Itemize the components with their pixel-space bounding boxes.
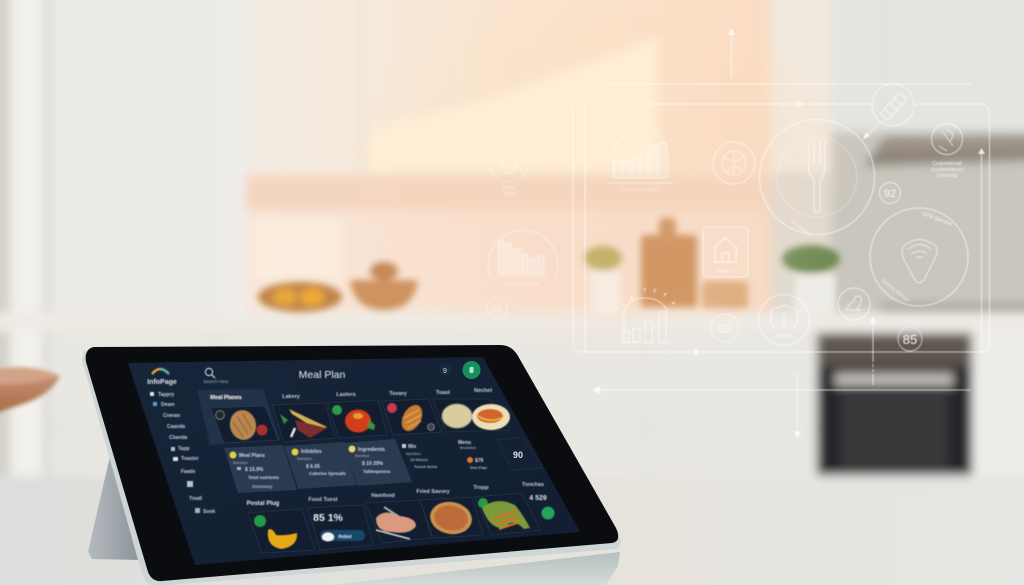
plant and pot right	[782, 245, 840, 317]
tablet kickstand	[88, 456, 138, 560]
food photos row 1	[216, 401, 510, 442]
number card: 90	[513, 450, 523, 460]
icon: shield circle	[758, 294, 810, 346]
bar chart: falling dome chart: Nutrition Balance	[505, 281, 540, 286]
badge: 92	[880, 182, 900, 204]
row 2 card contents: Tuned items	[414, 464, 438, 469]
icon: shield circle: Power	[777, 333, 791, 339]
row 2 card contents: Nutrition	[406, 452, 421, 456]
row 2 card contents: 10 Diners	[410, 457, 429, 462]
sidebar	[147, 369, 215, 515]
menu	[150, 392, 215, 515]
row 3 category labels: Food Tuest	[308, 497, 338, 503]
row 2 card contents	[230, 440, 488, 489]
row 3 category labels: Tonchas	[522, 482, 544, 488]
row 3 category labels: Postal Plug	[247, 501, 280, 507]
icon: small bird circle	[838, 288, 870, 320]
orange bowl	[258, 282, 342, 312]
row 2 card contents: Diet Plan	[470, 465, 488, 470]
menu: Tapp	[178, 446, 190, 452]
row 3 category labels: Fried Savory	[416, 489, 451, 495]
icon: faded scale circle	[490, 144, 528, 197]
tablet reflection on counter	[330, 552, 620, 585]
row 1 category labels: Tovary	[389, 391, 408, 397]
warm light glow	[360, 0, 840, 340]
holographic interface	[487, 28, 990, 438]
wooden plate at left edge	[0, 367, 60, 415]
icon: knife and fork badge with caption: coridemlaces	[931, 167, 963, 173]
icon: wifi location pin: GFS Service	[921, 211, 953, 228]
row 2 card contents: Tablespoons	[363, 469, 391, 474]
row 2 card contents: $ 10 20%	[362, 461, 384, 467]
icon: wifi location pin	[870, 208, 968, 306]
heading: Meal Plan: Meal Plan	[299, 369, 346, 381]
row 2 card contents: Breakfast	[460, 446, 477, 450]
cutting board and jar	[641, 218, 748, 308]
bar chart: bottom gauge chart	[615, 288, 678, 343]
row 3 category labels: Tropp	[473, 485, 489, 491]
logo	[147, 369, 177, 386]
badge: 32: 32	[491, 304, 503, 315]
search	[203, 368, 229, 384]
header action buttons	[439, 361, 480, 379]
food photos and stats row 3: 85 1%	[313, 512, 344, 524]
wooden bowl	[350, 262, 418, 310]
tablet body	[82, 345, 620, 585]
icon: house card	[703, 227, 748, 277]
row 3 food cards	[248, 493, 540, 553]
bar chart: falling dome chart	[488, 230, 558, 286]
badge: 85: 85	[903, 332, 917, 347]
row 1 food cards	[211, 399, 510, 443]
row 2 card contents: $ 15.9%	[245, 467, 264, 473]
search: Search Here	[203, 379, 229, 384]
icon: knife and fork badge with caption: Coaresional	[932, 161, 962, 167]
icon: faded scale circle: Meals	[502, 185, 516, 191]
menu: Cranan	[163, 413, 180, 419]
menu: Tmall	[189, 496, 203, 502]
row 3 category labels: Hamfood	[371, 493, 395, 499]
icon: faded scale circle: Today	[502, 191, 516, 197]
blurred kitchen objects	[258, 218, 840, 317]
icon: fork on plate: Flo Scares	[789, 219, 812, 238]
row 2 info cards	[224, 439, 412, 493]
menu: Sook	[203, 509, 215, 515]
menu: Tappry	[158, 392, 175, 398]
row 1 category labels: Toast	[436, 390, 450, 396]
row 2 card contents: Meal Plans	[239, 453, 265, 459]
row 2 card contents: Nutrition	[233, 461, 248, 465]
row 2 card contents: Total nutrients	[248, 475, 279, 480]
menu: Faads	[181, 469, 196, 475]
icon: knife and fork badge with caption	[931, 124, 963, 179]
badge: 85	[898, 327, 922, 351]
row 1 category labels	[197, 388, 492, 445]
icon: fork on plate	[760, 120, 874, 238]
badge: 32	[487, 298, 507, 318]
menu: Toaster	[181, 456, 199, 462]
row 2 card contents: $79	[475, 458, 484, 464]
row 2 card contents: Ingredients	[358, 447, 385, 453]
plant and vase left	[584, 246, 622, 315]
badge: 05: 05	[718, 322, 732, 336]
icon: globe circle	[713, 142, 755, 184]
row 2 card contents: Calories Spreads	[309, 471, 346, 476]
row 1 category labels: Lasters	[336, 392, 356, 398]
row 2 card contents: Mix	[408, 444, 417, 450]
number card	[497, 437, 543, 470]
icon: knife and fork badge with caption: Geocing	[937, 173, 957, 179]
food photos and stats row 3	[254, 495, 554, 549]
bar chart: rising dome chart	[608, 131, 672, 192]
menu: Deam	[161, 402, 175, 408]
row 2 card contents: Summary	[252, 484, 273, 489]
menu: Chanda	[169, 435, 188, 441]
food photos and stats row 3: Robot	[338, 534, 352, 539]
food photos and stats row 3: 4 529	[529, 495, 547, 502]
icon: house card: Deliveries	[715, 268, 736, 273]
icon: top right utensil circle	[872, 84, 914, 126]
header action buttons: 9	[443, 368, 447, 375]
row 2 card contents: $ 6.05	[306, 464, 320, 470]
row 2 card contents: Menu	[458, 440, 471, 446]
frame lines and arrows	[573, 28, 990, 438]
row 1 category labels: Meal Planes	[210, 395, 242, 401]
row 2 card contents: Infobites	[301, 449, 322, 455]
row 2 card contents: Nutrition	[355, 454, 370, 458]
badge: 05	[711, 314, 739, 342]
row 3 category labels	[247, 482, 544, 507]
row 1 category labels: Nechel	[474, 388, 492, 394]
bar chart: rising dome chart: Fitness Compliance	[620, 187, 660, 192]
logo: InfoPage	[147, 379, 177, 386]
tablet screen	[128, 357, 580, 565]
badge: 92: 92	[884, 188, 896, 200]
icon: wifi location pin: Service Sensor	[880, 278, 910, 304]
row 2 card contents: Nutrition	[297, 457, 312, 461]
menu: Caanda	[167, 424, 185, 430]
row 1 category labels: Lakery	[282, 394, 301, 400]
